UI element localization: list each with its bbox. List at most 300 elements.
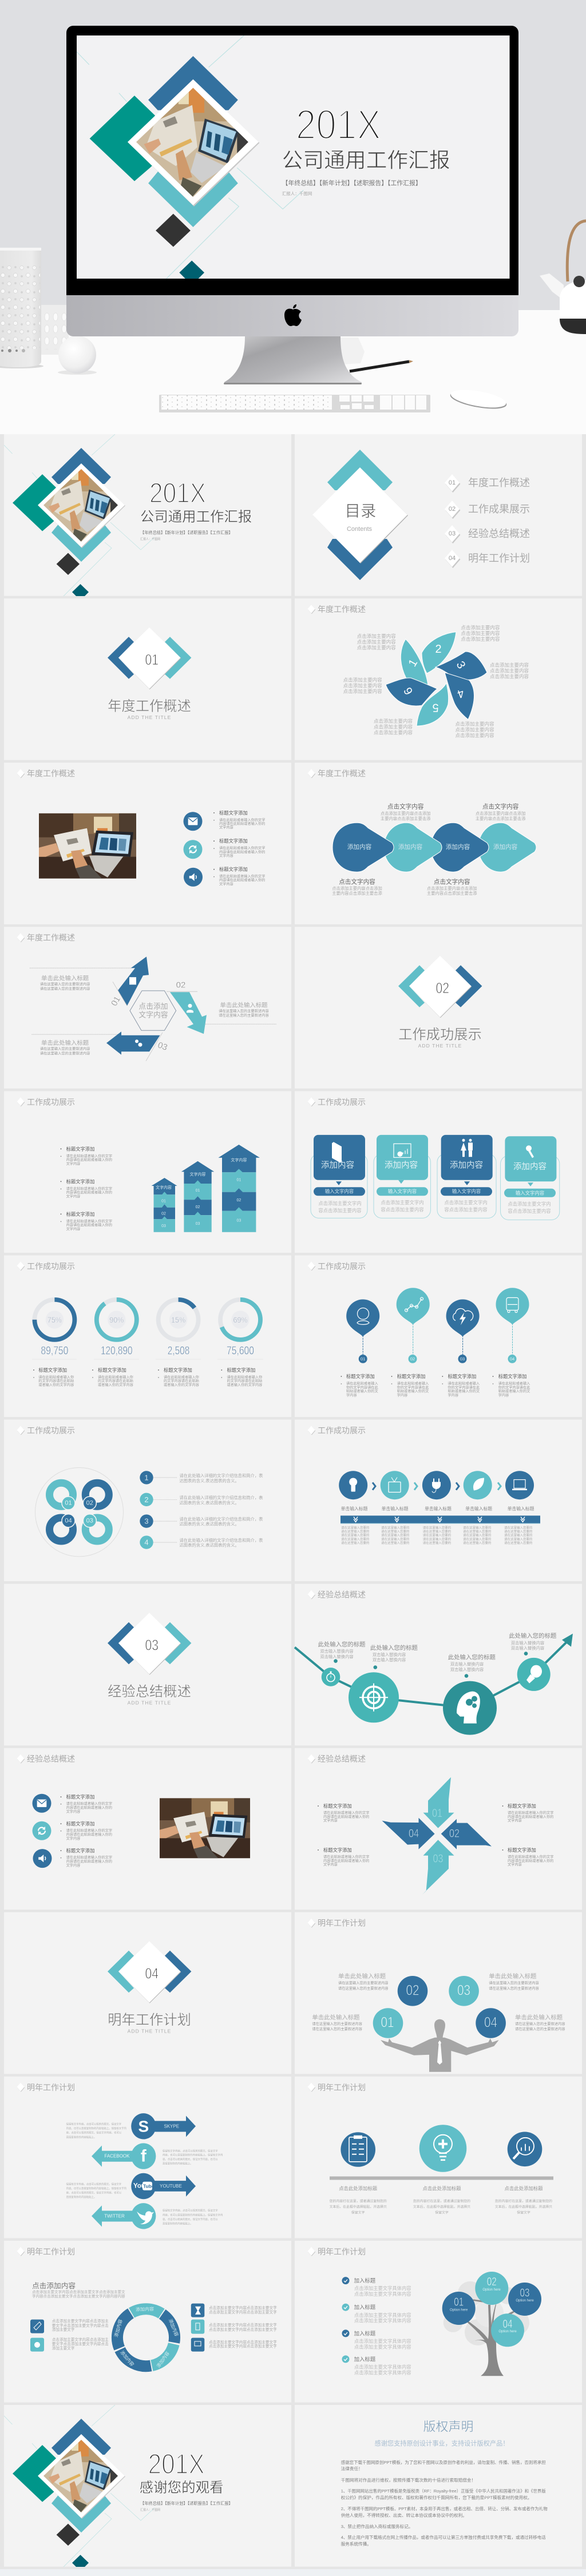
text column 3 xyxy=(158,1367,199,1387)
list item 3: 标题文字添加 xyxy=(66,1848,94,1853)
circle 01: 01 xyxy=(381,2015,394,2031)
text youtube: 直接复制你的内容粘贴上。 xyxy=(66,2195,96,2199)
icon: envelope xyxy=(32,1794,52,1813)
decor: white egg xyxy=(58,336,97,375)
list item 3 xyxy=(61,1848,112,1868)
icon: lightbulb xyxy=(419,2125,466,2172)
title text: 公司通用工作汇报 xyxy=(140,509,252,525)
text facebook: 内容。也可以直接复制你的内容粘贴上。保留核文字内 xyxy=(163,2153,223,2157)
screen: cover slide xyxy=(77,35,510,279)
text twitter: 直接复制你的内容粘贴上。 xyxy=(163,2221,193,2225)
header: 工作成功展示 xyxy=(27,1261,75,1271)
petal numbers: 5 xyxy=(432,701,439,714)
text block 01: 单击此处输入标题 xyxy=(312,2014,360,2021)
text block right: 单击此处输入标题 xyxy=(220,1001,268,1009)
check item 2: 点击添加主要文字具体内容 xyxy=(354,2318,411,2324)
step text 4: 请在这里输入您要的 xyxy=(463,1541,492,1545)
step text 1: 请在这里输入您要的 xyxy=(341,1541,370,1545)
text right 1: 点击添加主要文字内容点击添加主要文字 xyxy=(209,2305,277,2310)
list item 1: 请在此处输入详细的文字介绍信息和简介，表 xyxy=(180,1473,263,1478)
step text 1: 请在这里输入您要的 xyxy=(341,1525,370,1530)
label 1: 双击输入替换内容 xyxy=(320,1654,354,1659)
column 3 xyxy=(495,2185,552,2215)
step text 5: 请在这里输入您要的 xyxy=(504,1541,533,1545)
list item 3: 请在此粘贴或者输入你的文字 xyxy=(66,1855,112,1860)
card 2: 容点击添加主要内容 xyxy=(381,1206,424,1212)
timeline dots xyxy=(334,1652,528,1678)
text twitter: 容。点击可以相关的图文。保证文字内容。也可以 xyxy=(163,2217,218,2221)
list item 1: 内容请在此粘贴或者输入你的 xyxy=(219,821,265,826)
statistic numbers: 2,508 xyxy=(168,1344,189,1357)
section subtitle: ADD THE TITLE xyxy=(418,1043,462,1049)
arrow column 2: 02 xyxy=(196,1205,200,1209)
card 4: 容点击添加主要内容 xyxy=(508,1208,551,1214)
text left 1: 添加主要文字 xyxy=(52,2327,75,2332)
bubble 02: 02 xyxy=(487,2276,497,2288)
text youtube: 内容。也可以直接复制你的内容粘贴上。保留核文字内 xyxy=(66,2186,126,2190)
text lower right xyxy=(502,1847,553,1867)
card 1: 点击添加主要文字内 xyxy=(318,1200,362,1206)
arrow numbers xyxy=(409,1807,460,1865)
step text 2: 请在这里输入您要的 xyxy=(381,1541,410,1545)
text youtube xyxy=(66,2182,126,2199)
text left 2: 要文字点击添加主要文字内容点击 xyxy=(52,2341,109,2347)
contents item 03: 经验总结概述 xyxy=(468,528,530,539)
section subtitle: ADD THE TITLE xyxy=(128,715,171,720)
slide: ring chart xyxy=(4,2241,291,2403)
column 3: 文本后，在此框中选择粘贴，并选择只 xyxy=(495,2205,552,2209)
label 4 xyxy=(509,1632,556,1651)
bubble 04: Option here xyxy=(498,2330,517,2333)
top label 1 xyxy=(381,803,431,821)
slide: contents xyxy=(295,434,582,596)
text block 01: 请在这里输入您的主要叙述内容 xyxy=(312,2021,362,2026)
petal label 4: 点击添加主要内容 xyxy=(456,727,494,732)
step text 1: 请在这里输入您要的 xyxy=(341,1537,370,1541)
donut 90%: 90% xyxy=(109,1315,124,1324)
step text 5: 请在这里输入您要的 xyxy=(504,1525,533,1530)
text column 3: 字内容 xyxy=(448,1393,458,1398)
section number: 01 xyxy=(145,651,159,668)
slide: growth curve xyxy=(295,1584,582,1745)
petal label 1: 点击添加主要内容 xyxy=(357,639,396,645)
text upper right: 标题文字添加 xyxy=(508,1803,536,1809)
text block top left: 单击此处输入标题 xyxy=(41,975,89,982)
text lower right: 请在此粘贴或者输入你的文字 xyxy=(508,1855,553,1859)
text item 2: 标题文字添加 xyxy=(66,1178,94,1184)
step text 4: 请在这里输入您要的 xyxy=(463,1529,492,1534)
node: target xyxy=(349,1672,399,1722)
copyright body: 法律责任！ xyxy=(341,2466,363,2471)
step text 2 xyxy=(381,1525,410,1545)
text column 2 xyxy=(391,1374,429,1398)
list item 2: 请在此处输入详细的文字介绍信息和简介，表 xyxy=(180,1495,263,1500)
ring labels xyxy=(113,2306,180,2369)
text block 04 xyxy=(515,2014,565,2031)
hexagon text xyxy=(138,1002,168,1019)
contents item 02: 02 xyxy=(449,506,456,513)
text item 3: 内容请在此粘贴或者输入你的 xyxy=(66,1223,112,1228)
text upper left: 标题文字添加 xyxy=(323,1803,352,1809)
step bar xyxy=(340,1515,540,1524)
arrow 01 xyxy=(423,1777,454,1828)
text lower right: 文字内容 xyxy=(508,1863,522,1867)
card 4 xyxy=(501,1136,560,1220)
blue arrow left xyxy=(106,1031,160,1055)
check item 1: 点击添加主要文字具体内容 xyxy=(354,2291,411,2297)
facebook arrow xyxy=(92,2143,156,2169)
ring quadrant 02: 02 xyxy=(86,1500,93,1507)
circle 03 xyxy=(449,1976,479,2006)
wall and desk background xyxy=(0,0,586,434)
bubble 02: Option here xyxy=(482,2288,501,2292)
monitor stand xyxy=(224,336,362,384)
skype arrow: SKYPE xyxy=(164,2124,179,2129)
node: bulb xyxy=(517,1658,551,1691)
list item 3: 内容请在此粘贴或者输入你的 xyxy=(219,878,265,883)
crumpled paper xyxy=(338,338,365,364)
text item 2: 内容请在此粘贴或者输入你的 xyxy=(66,1190,112,1195)
chevrons xyxy=(373,1483,501,1490)
ring labels: 添加内容 xyxy=(113,2319,123,2338)
column 1: 您的内容打在这里，或者通过复制您的 xyxy=(330,2199,387,2204)
text column 4: 粘贴或者输入你的文 xyxy=(498,1389,530,1394)
label 1 xyxy=(318,1641,366,1659)
slide: donut statistics xyxy=(4,1255,291,1417)
check item 4 xyxy=(342,2355,411,2376)
pin 04 xyxy=(496,1288,529,1363)
hexagon text: 文字内容 xyxy=(138,1011,168,1019)
list item 2 xyxy=(61,1821,112,1841)
text block 01: 请在这里输入您的主要叙述内容 xyxy=(312,2026,362,2031)
petal label 3: 点击添加主要内容 xyxy=(490,668,529,674)
header: 工作成功展示 xyxy=(27,1426,75,1435)
step text 2: 请在这里输入您要的 xyxy=(381,1529,410,1534)
contents item 02 xyxy=(445,501,530,519)
check item 3: 加入标题 xyxy=(354,2330,376,2336)
label 2 xyxy=(370,1644,418,1662)
check item 4: 点击添加主要文字具体内容 xyxy=(354,2364,411,2370)
intro title: 点击添加内容 xyxy=(32,2281,76,2290)
text left 2: 添加主要文字 xyxy=(52,2345,75,2351)
donut 15%: 15% xyxy=(171,1315,185,1324)
icon: magnifier xyxy=(508,2132,542,2166)
label 1: 双击输入替换内容 xyxy=(320,1649,354,1654)
section title: 经验总结概述 xyxy=(108,1684,191,1700)
text column 4: 或者输入你的文字内容 xyxy=(227,1383,262,1387)
label 3: 双击输入替换内容 xyxy=(450,1667,484,1672)
slide: section 04 xyxy=(4,1912,291,2074)
card 1 xyxy=(311,1135,367,1218)
petal label 6: 点击添加主要内容 xyxy=(343,682,382,688)
text item 3: 请在此粘贴或者输入你的文字 xyxy=(66,1219,112,1224)
bottom label 1: 点击文字内容 xyxy=(339,878,375,886)
circle 04 xyxy=(476,2008,506,2038)
section title: 明年工作计划 xyxy=(108,2013,191,2028)
label 2: 此处输入您的标题 xyxy=(370,1644,418,1652)
contents item 01: 01 xyxy=(449,479,456,486)
arrow column 3: 01 xyxy=(237,1178,241,1182)
screen subtitle: 公司通用工作汇报 xyxy=(282,148,450,172)
text block top left xyxy=(40,975,90,991)
text upper right: 请在此粘贴或者输入你的文字 xyxy=(508,1811,553,1815)
top label 2 xyxy=(476,803,526,821)
step titles: 单击输入标题 xyxy=(465,1506,492,1511)
header: 年度工作概述 xyxy=(318,769,366,778)
header: 经验总结概述 xyxy=(27,1755,75,1764)
slide: cover xyxy=(4,434,291,596)
petal label 5: 点击添加主要内容 xyxy=(374,724,413,730)
arrow numbers: 02 xyxy=(176,980,185,990)
list item 1: 标题文字添加 xyxy=(66,1794,94,1800)
bubble 01 xyxy=(442,2292,476,2325)
shape labels: 添加内容 xyxy=(446,843,470,851)
check item 4: 加入标题 xyxy=(354,2356,376,2362)
step text 2: 请在这里输入您要的 xyxy=(381,1533,410,1538)
keyboard xyxy=(159,395,430,412)
text block 02: 请在这里输入您的主要叙述内容 xyxy=(338,1980,388,1986)
list item 1 xyxy=(213,810,265,830)
text right 3 xyxy=(209,2339,277,2349)
icon: speaker xyxy=(184,868,203,887)
bubble 04: 04 xyxy=(502,2318,513,2331)
step text 1 xyxy=(341,1525,370,1545)
text column 3: 你的文字内容请在此 xyxy=(448,1385,480,1390)
icon box left 2 xyxy=(30,2338,44,2352)
text upper left: 文字内容 xyxy=(323,1819,338,1823)
ring segments xyxy=(106,2298,186,2377)
shape labels: 添加内容 xyxy=(347,843,372,851)
step titles: 单击输入标题 xyxy=(508,1506,534,1511)
pin 04: 04 xyxy=(510,1356,514,1362)
text column 4: 请在此粘贴或者输入 xyxy=(498,1381,530,1386)
facebook arrow: f xyxy=(141,2147,147,2166)
list item 3: 3 xyxy=(144,1517,149,1526)
label 4: 双击输入替换内容 xyxy=(511,1646,544,1651)
apple logo xyxy=(284,304,302,326)
text item 3 xyxy=(61,1211,112,1231)
list item 1: 请在此粘贴或者输入你的文字 xyxy=(66,1801,112,1806)
curve line with arrow xyxy=(295,1634,573,1708)
step text 2: 请在这里输入您要的 xyxy=(381,1525,410,1530)
petal label 6: 点击添加主要内容 xyxy=(343,688,382,694)
mouse xyxy=(449,387,508,412)
step text 2: 请在这里输入您要的 xyxy=(381,1537,410,1541)
text column 3: 标题文字添加 xyxy=(448,1374,476,1379)
arrow numbers: 01 xyxy=(432,1807,442,1820)
contents item 04: 04 xyxy=(449,555,456,562)
petal label 5 xyxy=(374,719,413,736)
header: 经验总结概述 xyxy=(318,1755,366,1764)
step text 3: 请在这里输入您要的 xyxy=(423,1525,452,1530)
text column 2: 请在此粘贴或者输入 xyxy=(397,1381,429,1386)
list item 2 xyxy=(213,838,265,858)
section number: 02 xyxy=(436,979,449,997)
text twitter xyxy=(163,2209,223,2225)
slide: section 02 xyxy=(295,927,582,1089)
column 3: 您的内容打在这里，或者通过复制您的 xyxy=(495,2199,552,2204)
text block 04: 请在这里输入您的主要叙述内容 xyxy=(515,2021,565,2026)
step text 4: 请在这里输入您要的 xyxy=(463,1533,492,1538)
shape labels: 添加内容 xyxy=(398,843,423,851)
copyright subtitle: 感谢您支持原创设计事业，支持设计版权产品！ xyxy=(375,2439,509,2447)
arrow column 2: 文字内容 xyxy=(190,1172,206,1177)
card 2 xyxy=(374,1135,430,1218)
text upper right xyxy=(502,1803,553,1823)
column 2 xyxy=(413,2185,470,2215)
petal numbers: 6 xyxy=(402,685,415,697)
text right 3: 点击添加主要文字内容点击添加主要文字 xyxy=(209,2339,277,2344)
bubble 03: 03 xyxy=(520,2287,530,2300)
card 3: 点击添加主要文字内 xyxy=(444,1200,488,1205)
text item 1: 标题文字添加 xyxy=(66,1146,94,1152)
text skype xyxy=(66,2122,126,2139)
text block bottom left xyxy=(40,1039,90,1055)
icon: presentation board xyxy=(394,1144,411,1157)
bubble 01: 01 xyxy=(454,2296,464,2308)
list item 2: 请在此粘贴或者输入你的文字 xyxy=(66,1828,112,1833)
arrow column 3 xyxy=(219,1145,260,1232)
text column 3: 请在此粘贴或者输入 xyxy=(448,1381,480,1386)
top label 2: 点击文字内容 xyxy=(482,803,519,810)
icon: bulb xyxy=(339,1471,367,1499)
text block 02 xyxy=(338,1972,388,1991)
copyright body: 供他人使用，不得转授权、出卖、转让本协议或本协议中的权利。 xyxy=(341,2513,467,2518)
petal label 3: 点击添加主要内容 xyxy=(490,662,529,668)
icon box right 1 xyxy=(191,2304,204,2317)
list item 1: 标题文字添加 xyxy=(219,810,248,816)
pinwheel petals xyxy=(386,632,487,726)
top label 1: 点击文字内容 xyxy=(387,803,424,810)
list item 3: 内容请在此粘贴或者输入你的 xyxy=(66,1859,112,1864)
text lower left: 请在此粘贴或者输入你的文字 xyxy=(323,1855,369,1859)
petal label 2: 点击添加主要内容 xyxy=(461,630,500,636)
petal numbers: 4 xyxy=(456,686,466,700)
slide: tree xyxy=(295,2241,582,2403)
icon: clipboard xyxy=(340,2132,375,2167)
text item 1: 请在此粘贴或者输入你的文字 xyxy=(66,1154,112,1158)
petal label 2: 点击添加主要内容 xyxy=(461,636,500,642)
card 3: 添加内容 xyxy=(450,1160,483,1170)
contents subheading: Contents xyxy=(347,526,373,533)
text column 2: 粘贴或者输入你的文 xyxy=(397,1389,429,1394)
list item 3 xyxy=(140,1514,263,1528)
header: 工作成功展示 xyxy=(318,1426,366,1435)
arrow column 2: 03 xyxy=(196,1222,200,1226)
text column 1: 请在此粘贴或者输入你 xyxy=(38,1375,74,1379)
intro text: 字内容点击添加主要文字点击添加主要文字内容内容内容 xyxy=(32,2293,125,2299)
text left 1: 要文字点击添加主要文字内容点击 xyxy=(52,2323,109,2328)
text skype: 保留核文字内容。点击可以相关的图文。保证文字 xyxy=(66,2122,122,2126)
contents item 04: 明年工作计划 xyxy=(468,553,530,564)
card 2: 输入文字内容 xyxy=(388,1189,417,1194)
text block bottom left: 请在这里输入您的主要叙述内容 xyxy=(40,1046,90,1051)
label 3: 双击输入替换内容 xyxy=(450,1662,484,1667)
text column 4: 的文字内容请在此粘贴 xyxy=(227,1379,262,1383)
step text 5 xyxy=(504,1525,533,1545)
slide: four arrow pinwheel xyxy=(295,1748,582,1910)
facebook arrow: FACEBOOK xyxy=(104,2154,130,2159)
circle 02: 02 xyxy=(406,1983,419,1999)
text column 1 xyxy=(33,1367,74,1387)
text block right: 请在这里输入您的主要叙述内容 xyxy=(219,1013,269,1018)
text block top left: 请在这里输入您的主要叙述内容 xyxy=(40,981,90,986)
text youtube: 保留核文字内容。点击可以相关的图文。保证文字 xyxy=(66,2182,122,2186)
section number: 04 xyxy=(145,1965,159,1982)
card 4: 点击添加主要文字内 xyxy=(508,1201,551,1206)
bottom label 2: 点击文字内容 xyxy=(434,878,470,886)
check item 2 xyxy=(342,2304,411,2324)
header: 工作成功展示 xyxy=(27,1097,75,1106)
top label 2: 主要内容点击添加主要击添 xyxy=(476,816,526,821)
statistic numbers: 120,890 xyxy=(101,1344,133,1357)
arrow numbers: 04 xyxy=(409,1828,419,1840)
slide: juggling figure xyxy=(295,1912,582,2074)
text block bottom left: 请在这里输入您的主要叙述内容 xyxy=(40,1050,90,1055)
list item 3: 文字内容 xyxy=(66,1863,80,1868)
text block 03: 请在这里输入您的主要叙述内容 xyxy=(489,1986,539,1991)
arrow column 1 xyxy=(151,1178,177,1232)
section title: 工作成功展示 xyxy=(398,1027,482,1043)
list item 2: 请在此粘贴或者输入你的文字 xyxy=(219,846,265,851)
youtube arrow: YOUTUBE xyxy=(160,2184,182,2189)
ring quadrant 03: 03 xyxy=(86,1517,93,1524)
pin 01 xyxy=(346,1299,379,1363)
step text 5: 请在这里输入您要的 xyxy=(504,1537,533,1541)
pencil xyxy=(350,360,413,371)
bottom label 2: 点击添加主要内容点击添加 xyxy=(427,886,477,891)
text column 2: 或者输入你的文字内容 xyxy=(98,1383,133,1387)
ring labels: 添加内容 xyxy=(119,2349,135,2367)
slide: copyright xyxy=(295,2405,582,2567)
text upper left: 请在此粘贴或者输入你的文字 xyxy=(323,1811,369,1815)
top label 1: 点击添加主要内容点击添加 xyxy=(381,811,430,816)
list item 3: 文字内容 xyxy=(219,882,233,886)
column 2: 您的内容打在这里，或者通过复制您的 xyxy=(413,2199,470,2204)
statistic numbers: 75,600 xyxy=(227,1344,254,1357)
icon: tv xyxy=(381,1471,409,1499)
intro text xyxy=(32,2289,125,2299)
donut 69% xyxy=(220,1300,260,1340)
monitor chin xyxy=(66,295,518,336)
icon: refresh xyxy=(183,840,203,859)
text left 2 xyxy=(52,2337,109,2351)
slide: process chain xyxy=(295,1420,582,1581)
header: 明年工作计划 xyxy=(27,2083,75,2092)
text lower left: 标题文字添加 xyxy=(323,1847,352,1853)
header: 明年工作计划 xyxy=(318,2247,366,2256)
text block 01 xyxy=(312,2014,362,2031)
petal label 5: 点击添加主要内容 xyxy=(374,730,413,736)
slide: section 03 xyxy=(4,1584,291,1745)
list item 2: 标题文字添加 xyxy=(219,838,248,844)
check item 1 xyxy=(342,2277,411,2297)
card 4: 输入文字内容 xyxy=(516,1190,545,1196)
text column 3: 的文字内容请在此粘贴 xyxy=(164,1379,199,1383)
youtube arrow: Tube xyxy=(143,2184,155,2189)
column 1: 点击此处添加标题 xyxy=(339,2186,378,2192)
text block bottom left: 单击此处输入标题 xyxy=(41,1039,89,1046)
contents diamond graphic xyxy=(312,450,408,580)
thanks reporter: 汇报人：千图网 xyxy=(140,2508,160,2512)
check item 2: 加入标题 xyxy=(354,2304,376,2311)
monitor bezel xyxy=(66,26,518,295)
reporter: 汇报人：千图网 xyxy=(140,537,160,541)
column 1: 文本后，在此框中选择粘贴，并选择只 xyxy=(330,2205,387,2209)
check item 1: 点击添加主要文字具体内容 xyxy=(354,2285,411,2291)
contents item 02: 工作成果展示 xyxy=(468,503,530,515)
text item 2: 文字内容 xyxy=(66,1194,80,1198)
